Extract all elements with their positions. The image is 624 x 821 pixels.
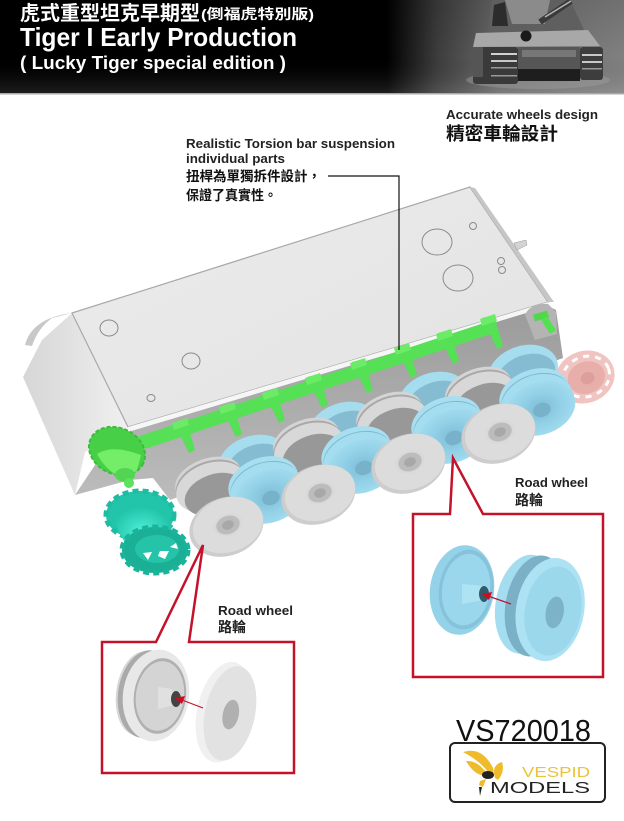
- torsion bar label: Realistic Torsion bar suspension: [186, 136, 395, 151]
- tank photo: [466, 0, 610, 89]
- right road wheel label: [515, 476, 588, 508]
- hull side: [75, 302, 563, 500]
- MODELS: MODELS: [490, 780, 590, 797]
- left exploded wheels: [110, 644, 265, 768]
- left callout box: [102, 545, 294, 773]
- fender curve: [25, 313, 72, 346]
- arrow: [182, 700, 203, 708]
- left track: [473, 47, 518, 84]
- torsion bar label: 扭桿為單獨拆件設計，: [186, 168, 321, 184]
- hatches and bolts: [100, 222, 506, 402]
- pink idler wheel: [548, 342, 622, 412]
- wheels design label: Accurate wheels design: [446, 107, 598, 122]
- left road wheel label: Road wheel: [218, 604, 293, 618]
- header banner: [0, 0, 624, 94]
- final drive: [81, 418, 153, 488]
- subtitle: ( Lucky Tiger special edition ): [20, 53, 286, 73]
- torsion bar label: 保證了真實性。: [186, 187, 277, 203]
- right callout box: [413, 458, 603, 677]
- right road wheel label: 路輪: [515, 492, 543, 508]
- bee icon: [463, 751, 503, 796]
- rear lug: [514, 240, 527, 250]
- leader line: [328, 176, 399, 350]
- front grey wheels: [181, 393, 544, 567]
- wheels design label: 精密車輪設計: [446, 123, 558, 144]
- left road wheel label: [218, 604, 293, 635]
- torsion bar label: [186, 136, 395, 203]
- right exploded wheels: [424, 541, 593, 667]
- teal sprocket: [106, 491, 188, 573]
- hull top plate: [72, 187, 548, 427]
- left road wheel label: 路輪: [218, 619, 246, 635]
- right track: [580, 47, 603, 80]
- tank hull assembly: [23, 187, 622, 573]
- idler mount: [525, 304, 557, 340]
- front blue wheels: [220, 359, 583, 534]
- lower hull: [518, 47, 580, 69]
- arrow: [488, 596, 511, 604]
- product code: VS720018: [456, 713, 591, 748]
- wheels design label: [446, 107, 598, 144]
- torsion bar label: individual parts: [186, 151, 285, 166]
- upper hull: [473, 30, 600, 47]
- title: English: Tiger I Early Production: [20, 22, 297, 52]
- title: Chinese edition: (倒福虎特別版): [201, 6, 314, 22]
- right road wheel label: Road wheel: [515, 476, 588, 490]
- brand logo: [450, 743, 605, 802]
- hull front plate: [23, 313, 128, 495]
- title: Chinese: 虎式重型坦克早期型: [20, 2, 200, 25]
- rear rim: [470, 187, 554, 302]
- VESPID: VESPID: [522, 764, 590, 781]
- rear grey wheels: [167, 358, 524, 526]
- turret: [488, 0, 585, 32]
- rear blue wheels: [210, 335, 566, 499]
- torsion bar arm strip: [137, 321, 497, 449]
- torsion bar spikes: [172, 314, 503, 453]
